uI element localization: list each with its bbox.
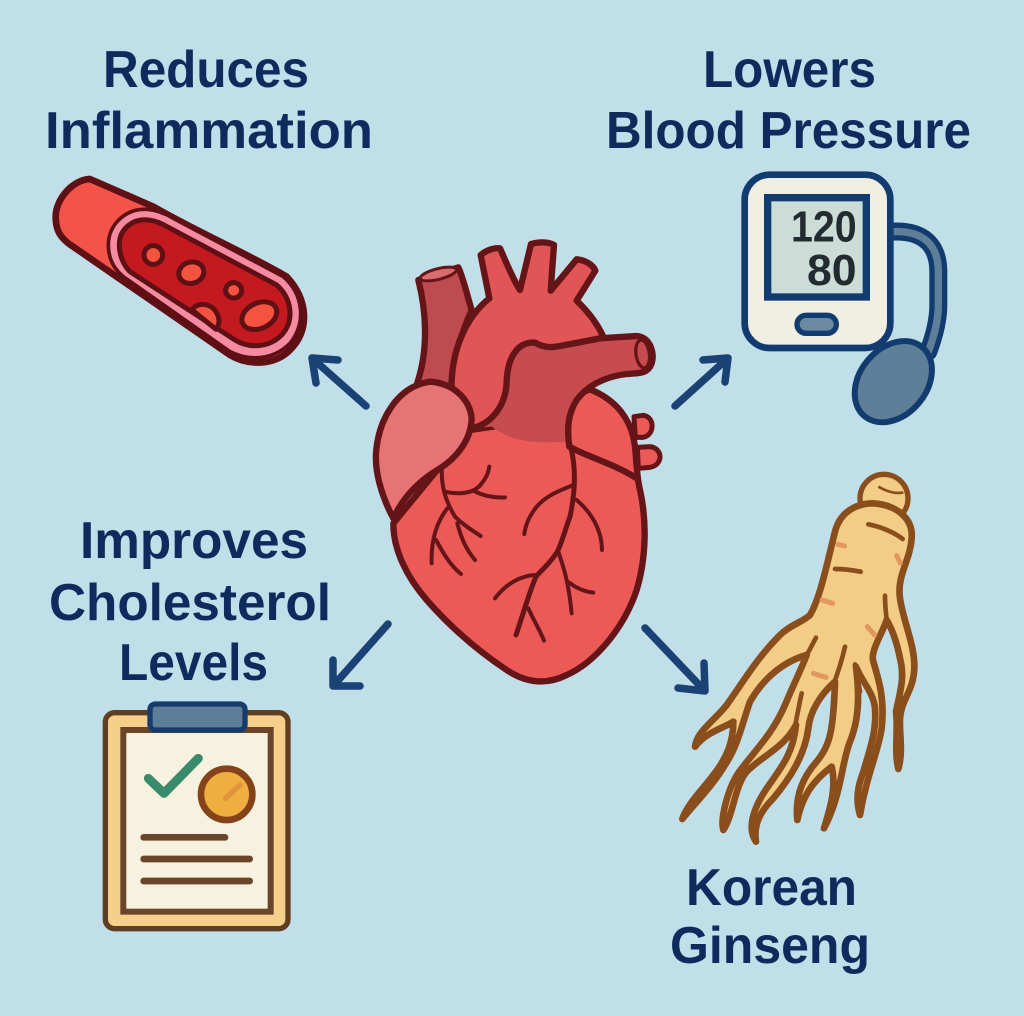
arrow: to ginseng (645, 628, 705, 691)
orange markings (813, 544, 900, 677)
tube (892, 232, 938, 352)
heading: Korean Ginseng: Korean (686, 859, 857, 917)
root body (682, 503, 914, 842)
heading: Korean Ginseng (670, 859, 870, 975)
heading: Improves Cholesterol Levels: Cholesterol (49, 574, 331, 632)
paper (123, 730, 271, 912)
heading: Lowers Blood Pressure: Blood Pressure (606, 102, 971, 160)
screen (768, 198, 866, 297)
arrow: to vessel (312, 358, 366, 406)
pulmonary artery (472, 336, 653, 442)
heading: Reduces Inflammation (45, 41, 373, 160)
superior vena cava (416, 267, 472, 390)
aortic arch and branches (452, 242, 606, 443)
heading: Improves Cholesterol Levels: Levels (119, 634, 268, 692)
readout (791, 203, 857, 295)
right coronary branches (495, 447, 602, 641)
heading: Reduces Inflammation: Inflammation (45, 102, 373, 160)
pulmonary stubs (634, 415, 652, 437)
heading: Korean Ginseng: Ginseng (670, 917, 870, 975)
board (105, 713, 288, 929)
cuff bulb (839, 326, 948, 438)
root crown (860, 474, 908, 522)
coin (201, 769, 252, 820)
monitor body (745, 175, 890, 348)
left coronary branches (432, 467, 505, 574)
text lines (144, 837, 250, 881)
right atrium (376, 382, 472, 518)
icon: clipboard report (105, 704, 288, 929)
root creases (794, 524, 903, 732)
icon: anatomical heart (376, 242, 660, 681)
arrow: to clipboard (333, 624, 388, 686)
readout: 120 (791, 203, 857, 252)
blood cells (144, 246, 281, 335)
heading: Reduces Inflammation: Reduces (103, 41, 309, 99)
heading: Lowers Blood Pressure: Lowers (703, 41, 876, 99)
check mark (148, 758, 198, 793)
ventricles (393, 389, 645, 681)
heading: Improves Cholesterol Levels (49, 512, 331, 692)
arrow: to monitor (675, 358, 728, 406)
clip (150, 704, 245, 730)
button (797, 315, 836, 333)
icon: ginseng root (682, 474, 914, 842)
icon: blood vessel (56, 179, 304, 363)
readout: 80 (807, 246, 857, 295)
heading: Improves Cholesterol Levels: Improves (80, 512, 308, 570)
heading: Lowers Blood Pressure (606, 41, 971, 160)
icon: blood pressure monitor (745, 175, 948, 438)
